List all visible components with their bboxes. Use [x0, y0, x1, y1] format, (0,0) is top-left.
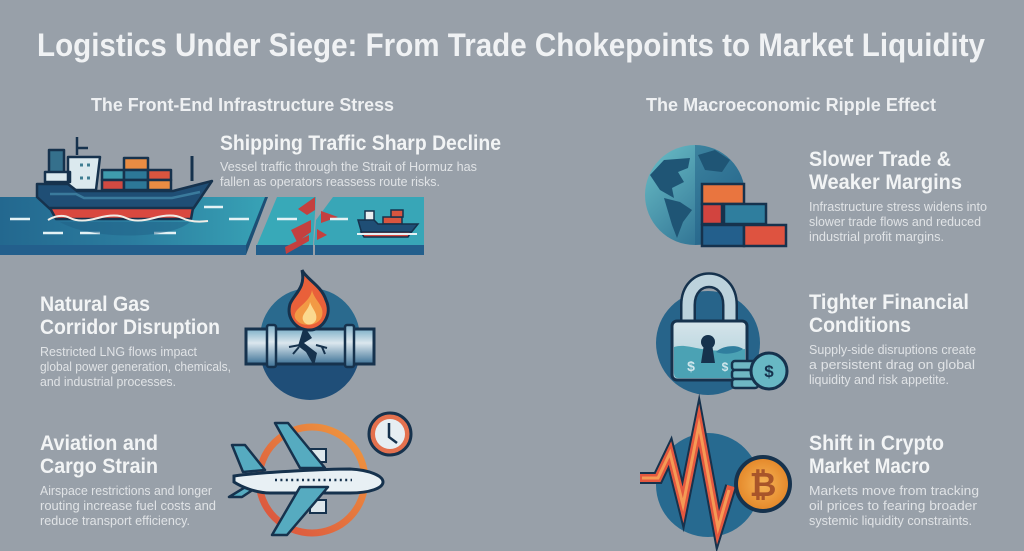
- icon: padlock with coins: $: [764, 362, 774, 381]
- text block: slower trade: industrial profit margins.: [809, 230, 944, 244]
- heading: right column: The Macroeconomic Ripple Effect: [646, 95, 936, 115]
- text block: financial conditions: liquidity and risk appetite.: [809, 373, 949, 387]
- text block: crypto: systemic liquidity constraints.: [809, 514, 972, 528]
- icon: padlock with coins: $: [722, 360, 729, 374]
- text block: aviation: Airspace restrictions and longer: [40, 484, 212, 498]
- text block: aviation: routing increase fuel costs and: [40, 499, 216, 513]
- text block: shipping: [220, 132, 501, 189]
- text block: shipping: fallen as operators reassess route risks.: [220, 175, 440, 189]
- text block: financial conditions: [809, 291, 976, 387]
- text block: slower trade: Weaker Margins: [809, 171, 962, 194]
- icon: volatile chart with bitcoin coin: [640, 425, 792, 537]
- text block: aviation: Aviation and: [40, 432, 158, 455]
- text block: natural gas: Natural Gas: [40, 293, 150, 316]
- text block: aviation: [40, 432, 216, 528]
- text block: crypto: oil prices to fearing broader: [809, 499, 977, 513]
- text block: crypto: Markets move from tracking: [809, 484, 979, 498]
- text block: slower trade: slower trade flows and reduced: [809, 215, 981, 229]
- text block: aviation: reduce transport efficiency.: [40, 514, 190, 528]
- ship wake shadow: [60, 222, 190, 236]
- icon: cargo ship on broken shipping lane: [0, 137, 424, 255]
- ship: [37, 137, 212, 219]
- text block: shipping: Shipping Traffic Sharp Decline: [220, 132, 501, 155]
- text block: slower trade: Infrastructure stress widens into: [809, 200, 987, 214]
- icon: globe with stacked containers: [645, 145, 786, 246]
- icon: padlock with coins: $: [687, 358, 695, 374]
- text block: crypto: Shift in Crypto: [809, 432, 944, 455]
- icon: volatile chart with bitcoin coin: ₿: [750, 466, 776, 503]
- text block: slower trade: [809, 148, 987, 244]
- text block: financial conditions: Tighter Financial: [809, 291, 969, 314]
- text block: natural gas: Restricted LNG flows impact: [40, 345, 198, 359]
- heading: left column: The Front-End Infrastructure Stress: [91, 95, 394, 115]
- text block: shipping: Vessel traffic through the Strait of Hormuz has: [220, 160, 477, 174]
- text block: financial conditions: Conditions: [809, 314, 911, 337]
- small ship: [358, 210, 418, 237]
- text block: slower trade: Slower Trade &: [809, 148, 951, 171]
- text block: natural gas: and industrial processes.: [40, 375, 176, 389]
- text block: financial conditions: Supply-side disruptions create: [809, 343, 976, 357]
- text block: natural gas: [40, 293, 231, 389]
- text block: natural gas: global power generation, chemicals,: [40, 360, 231, 374]
- text block: crypto: Market Macro: [809, 455, 930, 478]
- text block: crypto: [809, 432, 979, 528]
- icon: airplane with route ring and clock: [229, 413, 411, 535]
- icon: padlock with coins: [656, 280, 787, 395]
- text block: natural gas: Corridor Disruption: [40, 316, 220, 339]
- text block: aviation: Cargo Strain: [40, 455, 158, 478]
- icon: cracked pipeline with flame: [246, 270, 374, 400]
- text block: financial conditions: a persistent drag on global: [809, 358, 975, 372]
